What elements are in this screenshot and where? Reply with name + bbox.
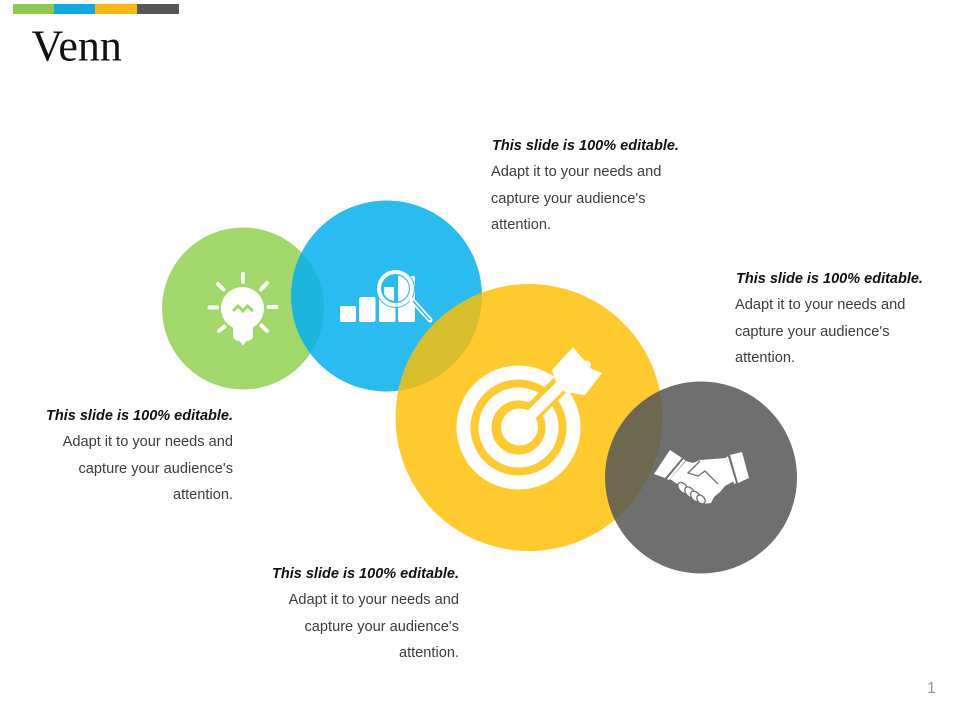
text block: top: capture your audience's [491,191,646,207]
text block: top: attention. [491,217,551,233]
text block: left: Adapt it to your needs and [63,434,233,450]
text block: right [735,271,923,366]
circle: blue [291,200,482,392]
text block: bottom: attention. [399,645,459,661]
text block: right: attention. [735,350,795,366]
text block: bottom: Adapt it to your needs and [289,592,459,608]
circle: gray [605,382,797,574]
text block: left [46,408,233,503]
text block: top: This slide is 100% editable. [492,138,679,154]
circle: green [162,228,324,390]
text block: bottom: This slide is 100% editable. [272,566,459,582]
text block: left: This slide is 100% editable. [46,408,233,424]
text block: top: Adapt it to your needs and [491,164,661,180]
text block: left: capture your audience's [78,461,233,477]
page number: 1 [927,680,936,697]
colour bar [13,4,179,14]
text block: right: This slide is 100% editable. [736,271,923,287]
title: Venn [32,22,122,70]
icon: bar chart with magnifier [340,269,430,322]
icon: light bulb [210,274,276,346]
circle: yellow [396,284,662,551]
icon: target with arrow [464,347,602,482]
icon: handshake [654,450,749,506]
text block: bottom: capture your audience's [304,619,459,635]
text block: left: attention. [173,487,233,503]
text block: right: capture your audience's [735,324,890,340]
text block: top [491,138,679,233]
text block: right: Adapt it to your needs and [735,297,905,313]
text block: bottom [272,566,459,661]
